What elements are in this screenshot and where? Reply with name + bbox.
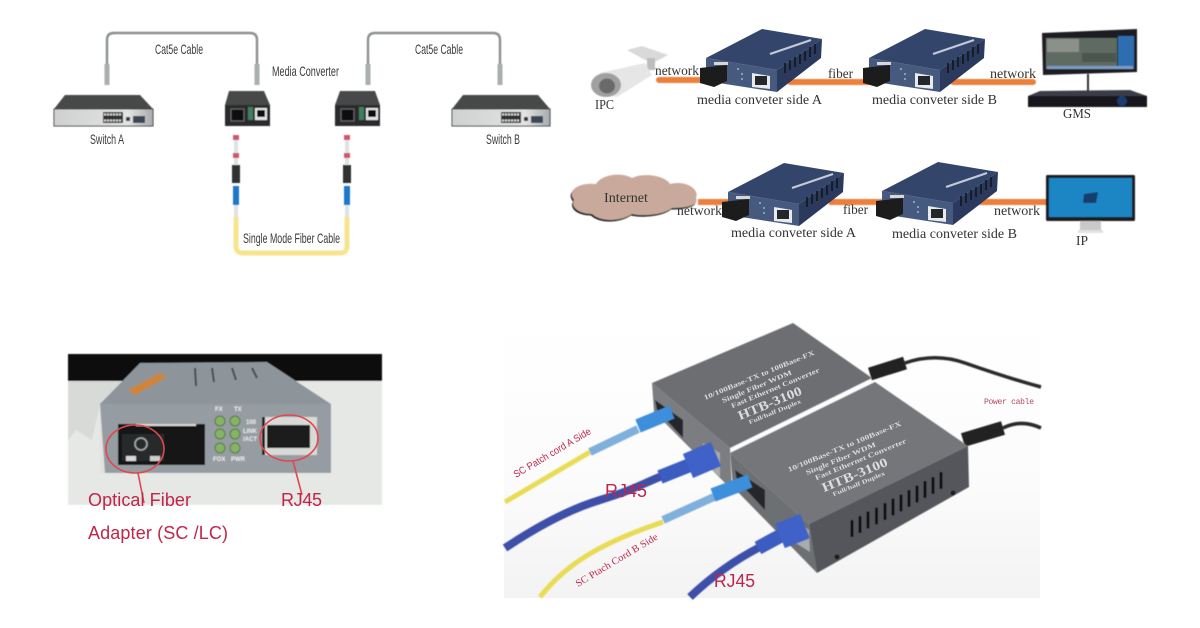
panel: IPC to GMS network diagram — [591, 29, 1147, 121]
photo of converter front — [68, 354, 382, 505]
label: Media Converter: Media Converter — [272, 63, 339, 79]
product text on back converter — [703, 349, 831, 438]
product text on front converter: 10/100Base-TX to 100Base-FX — [787, 420, 902, 474]
panel: Internet to IP network diagram — [571, 162, 1135, 248]
label: Switch B: Switch B — [486, 131, 520, 147]
label: SC Ptach Cord B Side: SC Ptach Cord B Side — [574, 531, 661, 590]
label: Internet: Internet — [604, 190, 648, 205]
product text on front converter: Single Fiber WDM — [805, 441, 878, 477]
switch A — [54, 95, 153, 126]
label: SC Patch cord A Side: SC Patch cord A Side — [512, 426, 594, 481]
label: fiber: fiber — [843, 202, 868, 217]
product text on front converter: Full/half Duplex — [832, 471, 886, 498]
photo of converter front: 100 — [246, 420, 257, 426]
label: Cat5e Cable right: Cat5e Cable — [415, 41, 463, 57]
back converter — [652, 323, 872, 490]
label: media conveter side A: media conveter side A — [731, 225, 856, 240]
product text on back converter: 10/100Base-TX to 100Base-FX — [703, 349, 816, 402]
media converter side B — [863, 29, 985, 92]
photo of converter front: LINK — [243, 429, 258, 435]
icon: Internet cloud — [571, 175, 697, 222]
panel: switch to switch fiber link diagram — [54, 33, 550, 253]
left Cat5e cable — [107, 33, 257, 85]
product text on back converter: HTB-3100 — [735, 383, 804, 423]
photo of converter front: PWR — [231, 457, 246, 463]
label: Cat5e Cable left: Cat5e Cable — [155, 41, 203, 57]
photo backdrop — [504, 322, 1040, 598]
photo of converter front: TX — [234, 407, 242, 413]
product text on front converter: Fast Ethernet Converter — [814, 437, 908, 482]
media converter B — [335, 91, 380, 126]
label: Optical Fiber: Optical Fiber — [88, 490, 191, 510]
blue RJ45 cables — [505, 454, 805, 597]
label: RJ45: RJ45 — [281, 490, 322, 510]
label: network recorder side: network — [990, 66, 1036, 81]
label: Adapter (SC /LC): Adapter (SC /LC) — [88, 523, 228, 543]
front converter — [730, 382, 969, 573]
label: network cloud side: network — [677, 203, 722, 218]
label: IP: IP — [1076, 233, 1088, 248]
media converter A — [225, 91, 270, 126]
label: network monitor side: network — [994, 203, 1040, 218]
icon: monitor and GMS recorder — [1028, 29, 1147, 107]
label: network camera side: network — [655, 63, 699, 78]
product text on front converter — [787, 420, 918, 510]
label: media conveter side B: media conveter side B — [872, 92, 997, 107]
orange network and fiber lines — [698, 199, 1047, 205]
label: Single Mode Fiber Cable: Single Mode Fiber Cable — [243, 230, 340, 246]
product text on back converter: Fast Ethernet Converter — [730, 366, 821, 410]
panel: photo of two HTB-3100 converters with cables — [504, 322, 1041, 598]
label: fiber: fiber — [828, 66, 853, 81]
photo of converter front: FX — [215, 407, 223, 413]
product text on front converter: HTB-3100 — [819, 454, 890, 495]
icon: computer monitor — [1046, 175, 1135, 233]
product text on back converter: Single Fiber WDM — [721, 369, 794, 405]
icon: IP camera — [591, 46, 668, 97]
label: IPC: IPC — [595, 97, 614, 112]
power cables — [870, 358, 1041, 440]
photo of converter front: /ACT — [243, 437, 257, 443]
media converter side B — [876, 162, 998, 225]
label: Switch A: Switch A — [90, 131, 124, 147]
photo of converter front: FOX — [213, 457, 225, 463]
label: GMS: GMS — [1063, 106, 1091, 121]
single mode fiber cable — [232, 135, 351, 253]
orange network and fiber lines — [659, 80, 1033, 82]
panel: photo of fiber adapter and RJ45 ports — [68, 354, 382, 543]
label: Power cable: Power cable — [984, 398, 1034, 407]
product text on back converter: Full/half Duplex — [748, 399, 802, 426]
label: media conveter side A: media conveter side A — [697, 92, 822, 107]
red callout: RJ45 — [260, 415, 318, 495]
switch B — [452, 95, 550, 126]
label: media conveter side B: media conveter side B — [892, 226, 1017, 241]
yellow and blue fiber patch cords — [505, 412, 750, 597]
red callout: optical fiber adapter — [106, 425, 164, 503]
label: RJ45 upper: RJ45 — [605, 481, 647, 501]
media converter side A — [722, 163, 844, 226]
right Cat5e cable — [368, 33, 500, 85]
media converter side A — [700, 29, 822, 92]
label: RJ45 lower: RJ45 — [714, 571, 755, 591]
